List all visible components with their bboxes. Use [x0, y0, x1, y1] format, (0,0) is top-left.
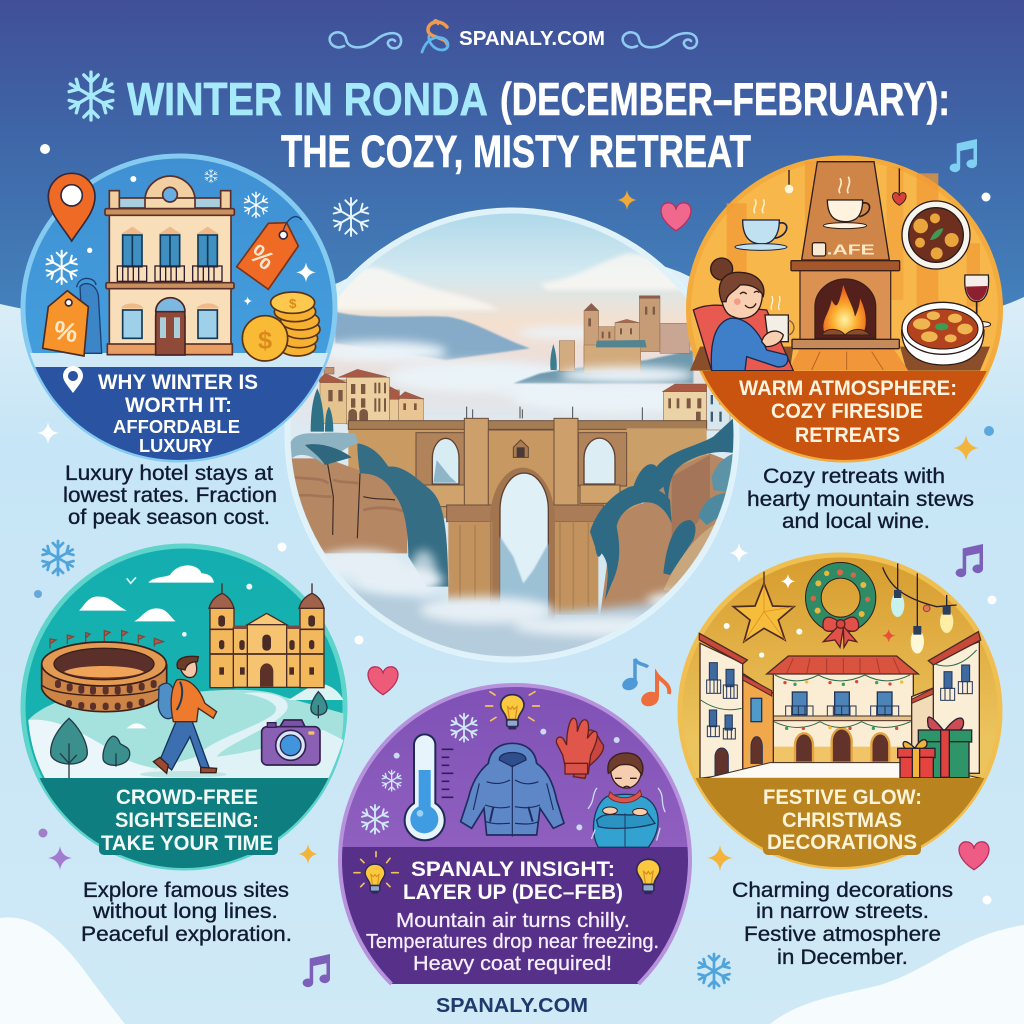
stew bowl: [902, 330, 984, 365]
teacup left: [743, 220, 779, 244]
title: [67, 72, 950, 177]
garlands: [774, 675, 911, 727]
panel illustration: .AFE: [827, 243, 875, 259]
hiker: [140, 771, 227, 778]
hotel building: [105, 176, 234, 355]
panel heading: DECORATIONS: [767, 831, 917, 854]
panel heading: AFFORDABLE: [113, 416, 240, 437]
stew plate: [902, 201, 970, 269]
panel body text: of peak season cost.: [68, 506, 270, 529]
panel heading: [403, 857, 623, 904]
snowy square: [705, 763, 982, 778]
icon: music notes: [303, 139, 983, 987]
icon: stars: [37, 190, 979, 871]
panel heading: LUXURY: [139, 435, 214, 456]
left town windows: [328, 383, 417, 421]
banner bulb left: [365, 864, 385, 893]
panel illustration: [43, 169, 320, 361]
central frame ring: [288, 211, 736, 659]
string lights: [883, 563, 957, 627]
castle windows: [588, 307, 655, 338]
fog in the gorge: [317, 550, 727, 637]
woman with mug: [693, 305, 793, 371]
panel: crowd-free sightseeing: [20, 546, 350, 946]
panel heading: COZY FIRESIDE: [771, 400, 923, 423]
panel body text: Explore famous sites: [83, 879, 289, 902]
panel body text: without long lines.: [92, 900, 278, 923]
bulb top: [501, 695, 524, 728]
dots: [394, 729, 620, 830]
panel illustration: $: [258, 326, 272, 354]
icon: white snowflake: [332, 198, 370, 236]
icon: pin on banner: [63, 366, 83, 393]
icon: hearts: [368, 203, 989, 870]
hotel windows: [123, 235, 217, 267]
banner bulb right: [637, 859, 660, 893]
panel heading: LAYER UP (DEC–FEB): [403, 880, 623, 904]
central arches: [795, 728, 889, 763]
snowy ground: [28, 690, 343, 778]
snowflakes: [45, 251, 79, 284]
camera: [262, 727, 320, 765]
swirl: right: [623, 32, 697, 48]
wine glass: [965, 275, 989, 302]
panel illustration: [28, 565, 343, 778]
gifts: [898, 717, 972, 778]
cold person: [593, 794, 658, 847]
heading plate: [763, 833, 921, 855]
panel heading: RETREATS: [795, 424, 900, 447]
coloured dots: [34, 426, 994, 838]
panel heading: CHRISTMAS: [782, 809, 902, 832]
panel body text: Luxury hotel stays at: [65, 462, 273, 485]
right town: [662, 383, 730, 430]
left cliff: [290, 433, 448, 587]
star: [733, 583, 794, 642]
panel heading: [101, 786, 273, 855]
hanging lamp and heart: [789, 168, 899, 193]
chimney: [802, 162, 889, 260]
bullring flags: [50, 631, 163, 648]
panel illustration: %: [51, 315, 80, 348]
panel heading: [98, 371, 258, 456]
panel heading: SPANALY INSIGHT:: [411, 857, 615, 881]
snowflakes: [450, 714, 478, 742]
panel heading: WHY WINTER IS: [98, 371, 258, 394]
central frame: [286, 209, 738, 661]
panel disc: [23, 546, 345, 868]
panel ground strip: [20, 353, 340, 368]
title line one highlight: WINTER IN RONDA: [127, 73, 488, 125]
panel body text: in narrow streets.: [756, 900, 929, 923]
fireplace: [800, 270, 891, 340]
panel disc: [340, 685, 690, 984]
mist over the castle foot: [515, 359, 694, 384]
panel body text: [63, 462, 277, 529]
panel banner: [35, 367, 323, 460]
panel heading: SIGHTSEEING:: [115, 809, 259, 832]
brand header: [330, 20, 697, 52]
fog behind the town: [328, 323, 670, 412]
right town windows: [668, 398, 701, 421]
panel heading: CROWD-FREE: [116, 786, 258, 809]
coin stack: [271, 292, 320, 356]
panel body text: in December.: [777, 946, 908, 969]
panel body text: lowest rates. Fraction: [63, 484, 277, 507]
trees: [51, 692, 327, 778]
wall stripes: [727, 162, 980, 310]
snow drift: bottom left: [0, 917, 125, 1024]
panel illustration: $: [289, 296, 297, 311]
panel heading: WARM ATMOSPHERE:: [739, 377, 957, 400]
panel body text: Temperatures drop near freezing.: [366, 930, 659, 953]
icon: blue snowflake right: [697, 954, 731, 988]
central windows: [792, 692, 892, 715]
bullring arches: [55, 680, 157, 710]
panel body text: Cozy retreats with: [763, 465, 945, 488]
swirl: left: [330, 32, 401, 48]
title line two: THE COZY, MISTY RETREAT: [281, 126, 751, 177]
panel banner: [696, 778, 984, 867]
gorge shade: [350, 586, 660, 656]
logo text: SPANALY.COM: [459, 28, 605, 50]
panel: spanaly insight: [335, 685, 695, 987]
wreath bow: [823, 617, 859, 631]
snow drift: bottom right: [770, 925, 1024, 1024]
panel heading: TAKE YOUR TIME: [101, 832, 273, 855]
panel body text: [366, 909, 659, 975]
dots: [40, 144, 996, 904]
wreath: [813, 570, 868, 625]
scene: [280, 210, 747, 663]
panel heading: WORTH IT:: [125, 394, 232, 417]
footer brand: SPANALY.COM: [436, 995, 588, 1017]
panel body text: and local wine.: [782, 510, 930, 533]
gloves: [573, 730, 604, 778]
panel disc: [23, 156, 335, 460]
thermometer: [405, 734, 445, 840]
cafe sign: [812, 243, 826, 256]
panel body text: [81, 879, 292, 946]
panel: why winter is worth it: [20, 156, 340, 529]
panel rim: [340, 685, 690, 984]
panel: festive glow: [675, 555, 1005, 969]
panel banner: [40, 778, 328, 868]
panel body text: hearty mountain stews: [747, 488, 974, 511]
floor: [690, 347, 990, 371]
left town: [318, 367, 424, 424]
panel disc: [680, 555, 1000, 867]
panel heading: FESTIVE GLOW:: [763, 786, 922, 809]
left buildings: [743, 673, 773, 773]
background: winter sky: [0, 0, 1024, 340]
panel banner: [702, 371, 987, 460]
panel: warm atmosphere: [680, 158, 1010, 533]
panel body text: Heavy coat required!: [413, 952, 612, 975]
panel disc: [688, 158, 1000, 460]
central building: [773, 673, 913, 763]
location pin: [48, 173, 95, 241]
logo icon: [422, 20, 448, 52]
bullring: [42, 665, 167, 712]
panel illustration: [699, 563, 982, 778]
panel heading: [739, 377, 957, 447]
central illustration: Puente Nuevo in the mist: [280, 209, 747, 663]
hotel door: [156, 298, 185, 355]
dots and sparkles: [87, 176, 316, 305]
panel illustration: %: [244, 238, 280, 276]
price tag: orange: [237, 223, 298, 289]
panel body text: Charming decorations: [732, 879, 953, 902]
panel body text: [747, 465, 974, 533]
right cliff: [590, 417, 735, 617]
clouds: [79, 565, 343, 728]
church windows: [218, 615, 315, 687]
church: [209, 583, 324, 688]
decorations: [34, 139, 996, 988]
panel body text: Peaceful exploration.: [81, 923, 292, 946]
panel illustration: [354, 692, 665, 893]
cypress trees: [311, 388, 333, 432]
panel illustration: [690, 162, 991, 371]
panel body text: Festive atmosphere: [744, 923, 941, 946]
castle on the hill: [513, 296, 693, 383]
distant mountain: [335, 312, 530, 360]
price tag: yellow: [80, 284, 102, 353]
hotel balconies: [117, 266, 222, 281]
icon: title snowflake: [67, 72, 115, 120]
panel banner: [335, 847, 695, 987]
coffee cup chimney: [827, 200, 863, 222]
puffer jacket: [461, 743, 564, 835]
heading plate: [99, 833, 278, 855]
icon: blue snowflake left: [41, 541, 75, 575]
panel body text: Mountain air turns chilly.: [396, 909, 630, 932]
panel body text: [732, 879, 953, 969]
bridge: [348, 407, 707, 620]
clouds: [333, 253, 693, 310]
sky dots: [182, 584, 252, 637]
sparkles: [724, 574, 802, 658]
right buildings: [912, 687, 937, 760]
hotel window arches: [121, 227, 219, 308]
panel heading: [763, 786, 922, 854]
background: snowy hills: [0, 249, 1024, 1024]
